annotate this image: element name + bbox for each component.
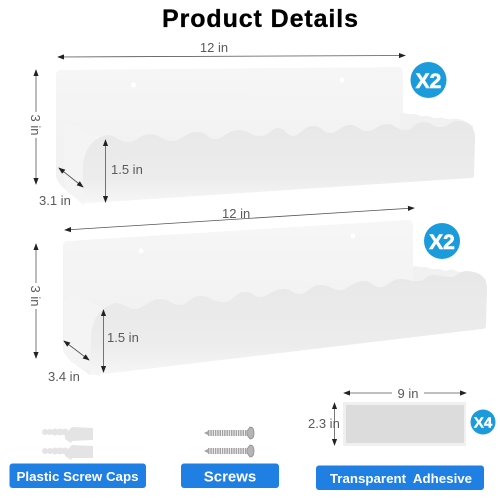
dimension: shelf 1 depth: 3.1 in	[39, 193, 71, 208]
dimension: adhesive width: 9 in	[398, 386, 418, 401]
button: transparent adhesive	[316, 466, 484, 490]
dimension: shelf 2 width: 12 in	[222, 206, 250, 221]
icon: plastic screw caps	[42, 427, 93, 460]
shelf 2 mounting holes	[138, 234, 356, 254]
badge: X2 shelf 2: X2	[429, 231, 455, 254]
dimension: shelf 2 height	[28, 244, 44, 358]
icon: screws	[204, 427, 254, 457]
dimension: shelf 2 front height	[104, 310, 139, 372]
shelf 1 far scallops	[400, 113, 473, 140]
dimension: adhesive width	[344, 385, 466, 401]
shelf 1 front panel	[83, 121, 475, 203]
button: transparent adhesive: Transparent Adhesive	[330, 471, 472, 486]
button: plastic screw caps	[10, 464, 146, 488]
shelf 2 side	[64, 293, 104, 376]
shelf 1 back panel	[56, 67, 403, 203]
dimension: shelf 1 front height	[106, 140, 143, 202]
dimension: adhesive height	[308, 403, 340, 445]
shelf 1 side	[64, 124, 100, 205]
dimension: shelf 1 height: 3 in	[28, 115, 43, 135]
dimension: shelf 1 width: 12 in	[200, 40, 228, 55]
button: screws	[181, 464, 279, 488]
dimension: shelf 1 height	[28, 70, 44, 184]
dimension: shelf 1 depth	[39, 168, 83, 208]
shelf 1 mounting holes	[131, 78, 344, 88]
badge: X4: X4	[474, 414, 493, 432]
dimension: shelf 1 front height: 1.5 in	[111, 162, 143, 177]
dimension: shelf 2 depth: 3.4 in	[48, 369, 80, 384]
shelf 2 front panel	[90, 271, 487, 375]
shelf 2	[63, 220, 487, 376]
dimension: shelf 2 front height: 1.5 in	[107, 330, 139, 345]
dimension: shelf 2 width	[65, 206, 414, 230]
shelf 2 far scallops	[413, 266, 486, 295]
button: screws: Screws	[204, 468, 256, 486]
badge: X2 shelf 1	[410, 62, 446, 98]
button: plastic screw caps: Plastic Screw Caps	[17, 469, 138, 484]
icon: adhesive strip	[343, 402, 466, 446]
shelf 2 back panel	[63, 220, 413, 375]
badge: X2 shelf 1: X2	[416, 70, 441, 93]
dimension: adhesive height: 2.3 in	[308, 416, 340, 431]
shelf 1	[56, 67, 475, 205]
title: Product Details	[162, 5, 358, 33]
badge: X4	[470, 410, 496, 434]
badge: X2 shelf 2	[424, 223, 460, 259]
dimension: shelf 2 depth	[48, 341, 89, 384]
dimension: shelf 2 height: 3 in	[28, 286, 43, 306]
